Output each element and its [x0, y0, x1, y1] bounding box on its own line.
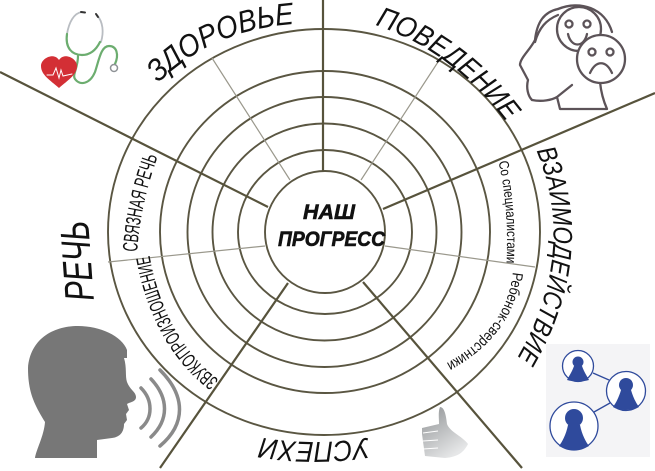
label: Со специалистами: Со специалистами [499, 161, 514, 263]
label: Ребенок-сверстники: Ребенок-сверстники [447, 273, 523, 370]
center title: ПРОГРЕСС [278, 228, 386, 251]
icon: speaking head [28, 326, 180, 458]
thin sub-dividers [108, 58, 535, 267]
label: ЗВУКОПРОИЗНОШЕНИЕ: ЗВУКОПРОИЗНОШЕНИЕ [136, 256, 218, 390]
label: СВЯЗНАЯ РЕЧЬ: СВЯЗНАЯ РЕЧЬ [122, 155, 157, 251]
heading: УСПЕХИ: УСПЕХИ [258, 438, 368, 462]
heading: ПОВЕДЕНИЕ: ПОВЕДЕНИЕ [376, 8, 522, 120]
icon: stethoscope and heart [41, 12, 118, 88]
center title [278, 201, 386, 251]
icon: connected people panel [546, 344, 650, 457]
icon: thumbs up [422, 407, 468, 458]
center title: НАШ [303, 201, 355, 224]
heading: РЕЧЬ: РЕЧЬ [60, 222, 94, 300]
icon: head with smiley and sad faces [520, 5, 625, 109]
heading: ВЗАИМОДЕЙСТВИЕ: ВЗАИМОДЕЙСТВИЕ [518, 148, 572, 368]
concentric rings [108, 29, 540, 435]
